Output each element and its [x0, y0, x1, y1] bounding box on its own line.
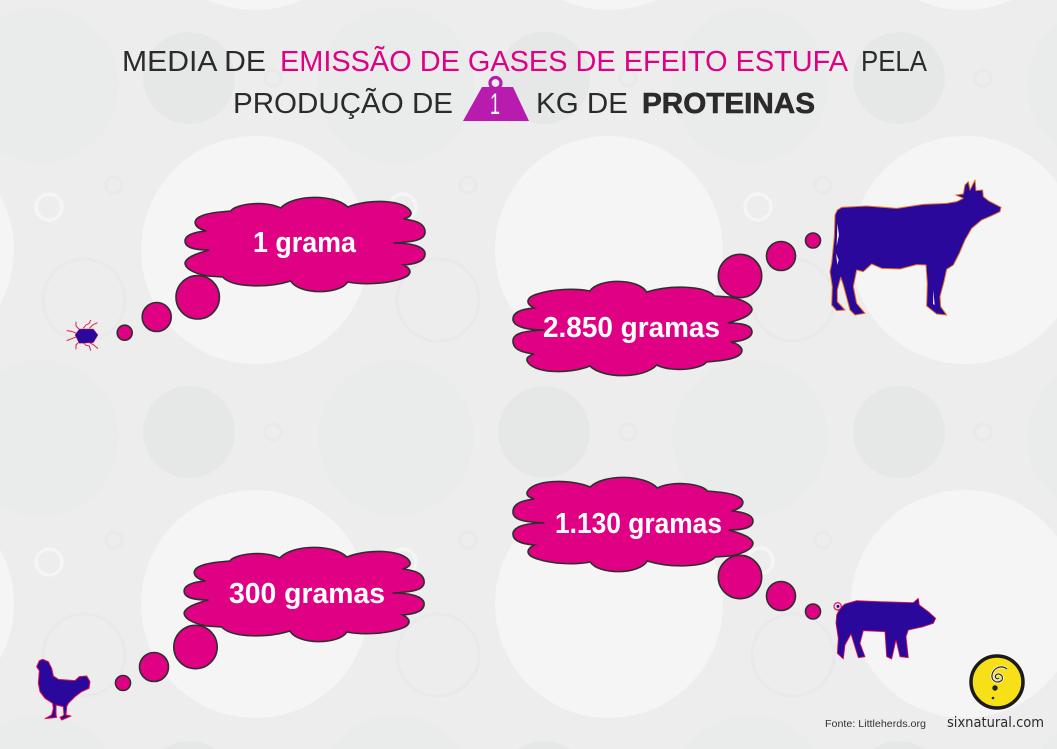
thought bubbles — [718, 555, 820, 619]
cloud: 300 gramas: 300 gramas — [229, 578, 385, 610]
panel: pig emissions — [513, 477, 936, 659]
title line 2: PRODUÇÃO DE — [233, 86, 453, 120]
logo badge — [971, 656, 1023, 708]
cloud: 1.130 gramas — [513, 477, 753, 572]
title line 1: PELA — [861, 46, 928, 78]
cloud: 1.130 gramas: 1.130 gramas — [555, 508, 722, 540]
panel: chicken emissions — [37, 547, 424, 720]
title line 1 — [122, 44, 928, 78]
cloud: 1 grama — [185, 197, 425, 292]
thought bubbles — [718, 233, 820, 298]
panel: mite emissions — [67, 197, 425, 351]
cloud: 2.850 gramas: 2.850 gramas — [543, 312, 720, 344]
cloud: 300 gramas — [184, 547, 424, 642]
icon: 1 kg weight: 1 — [490, 88, 500, 121]
thought bubbles — [116, 625, 217, 690]
thought bubbles — [117, 276, 219, 340]
title — [122, 44, 928, 120]
icon: chicken — [37, 659, 90, 720]
icon: pig — [834, 598, 936, 659]
icon: cow — [830, 180, 1001, 315]
cloud: 1 grama: 1 grama — [253, 227, 357, 259]
logo text: sixnatural.com — [947, 715, 1044, 731]
logo: sixnatural — [947, 656, 1044, 731]
title line 1: EMISSÃO DE GASES DE EFEITO ESTUFA — [280, 44, 849, 78]
source note: Fonte: Littleherds.org — [825, 719, 926, 730]
cloud: 2.850 gramas — [513, 281, 752, 376]
title line 1: MEDIA DE — [122, 46, 266, 78]
panel: cow emissions — [513, 180, 1001, 376]
title line 2: PROTEINAS — [642, 88, 815, 120]
title line 2 — [233, 86, 815, 120]
title line 2: KG DE — [536, 88, 628, 120]
icon: mite — [67, 320, 98, 351]
icon: 1 kg weight — [463, 78, 529, 121]
